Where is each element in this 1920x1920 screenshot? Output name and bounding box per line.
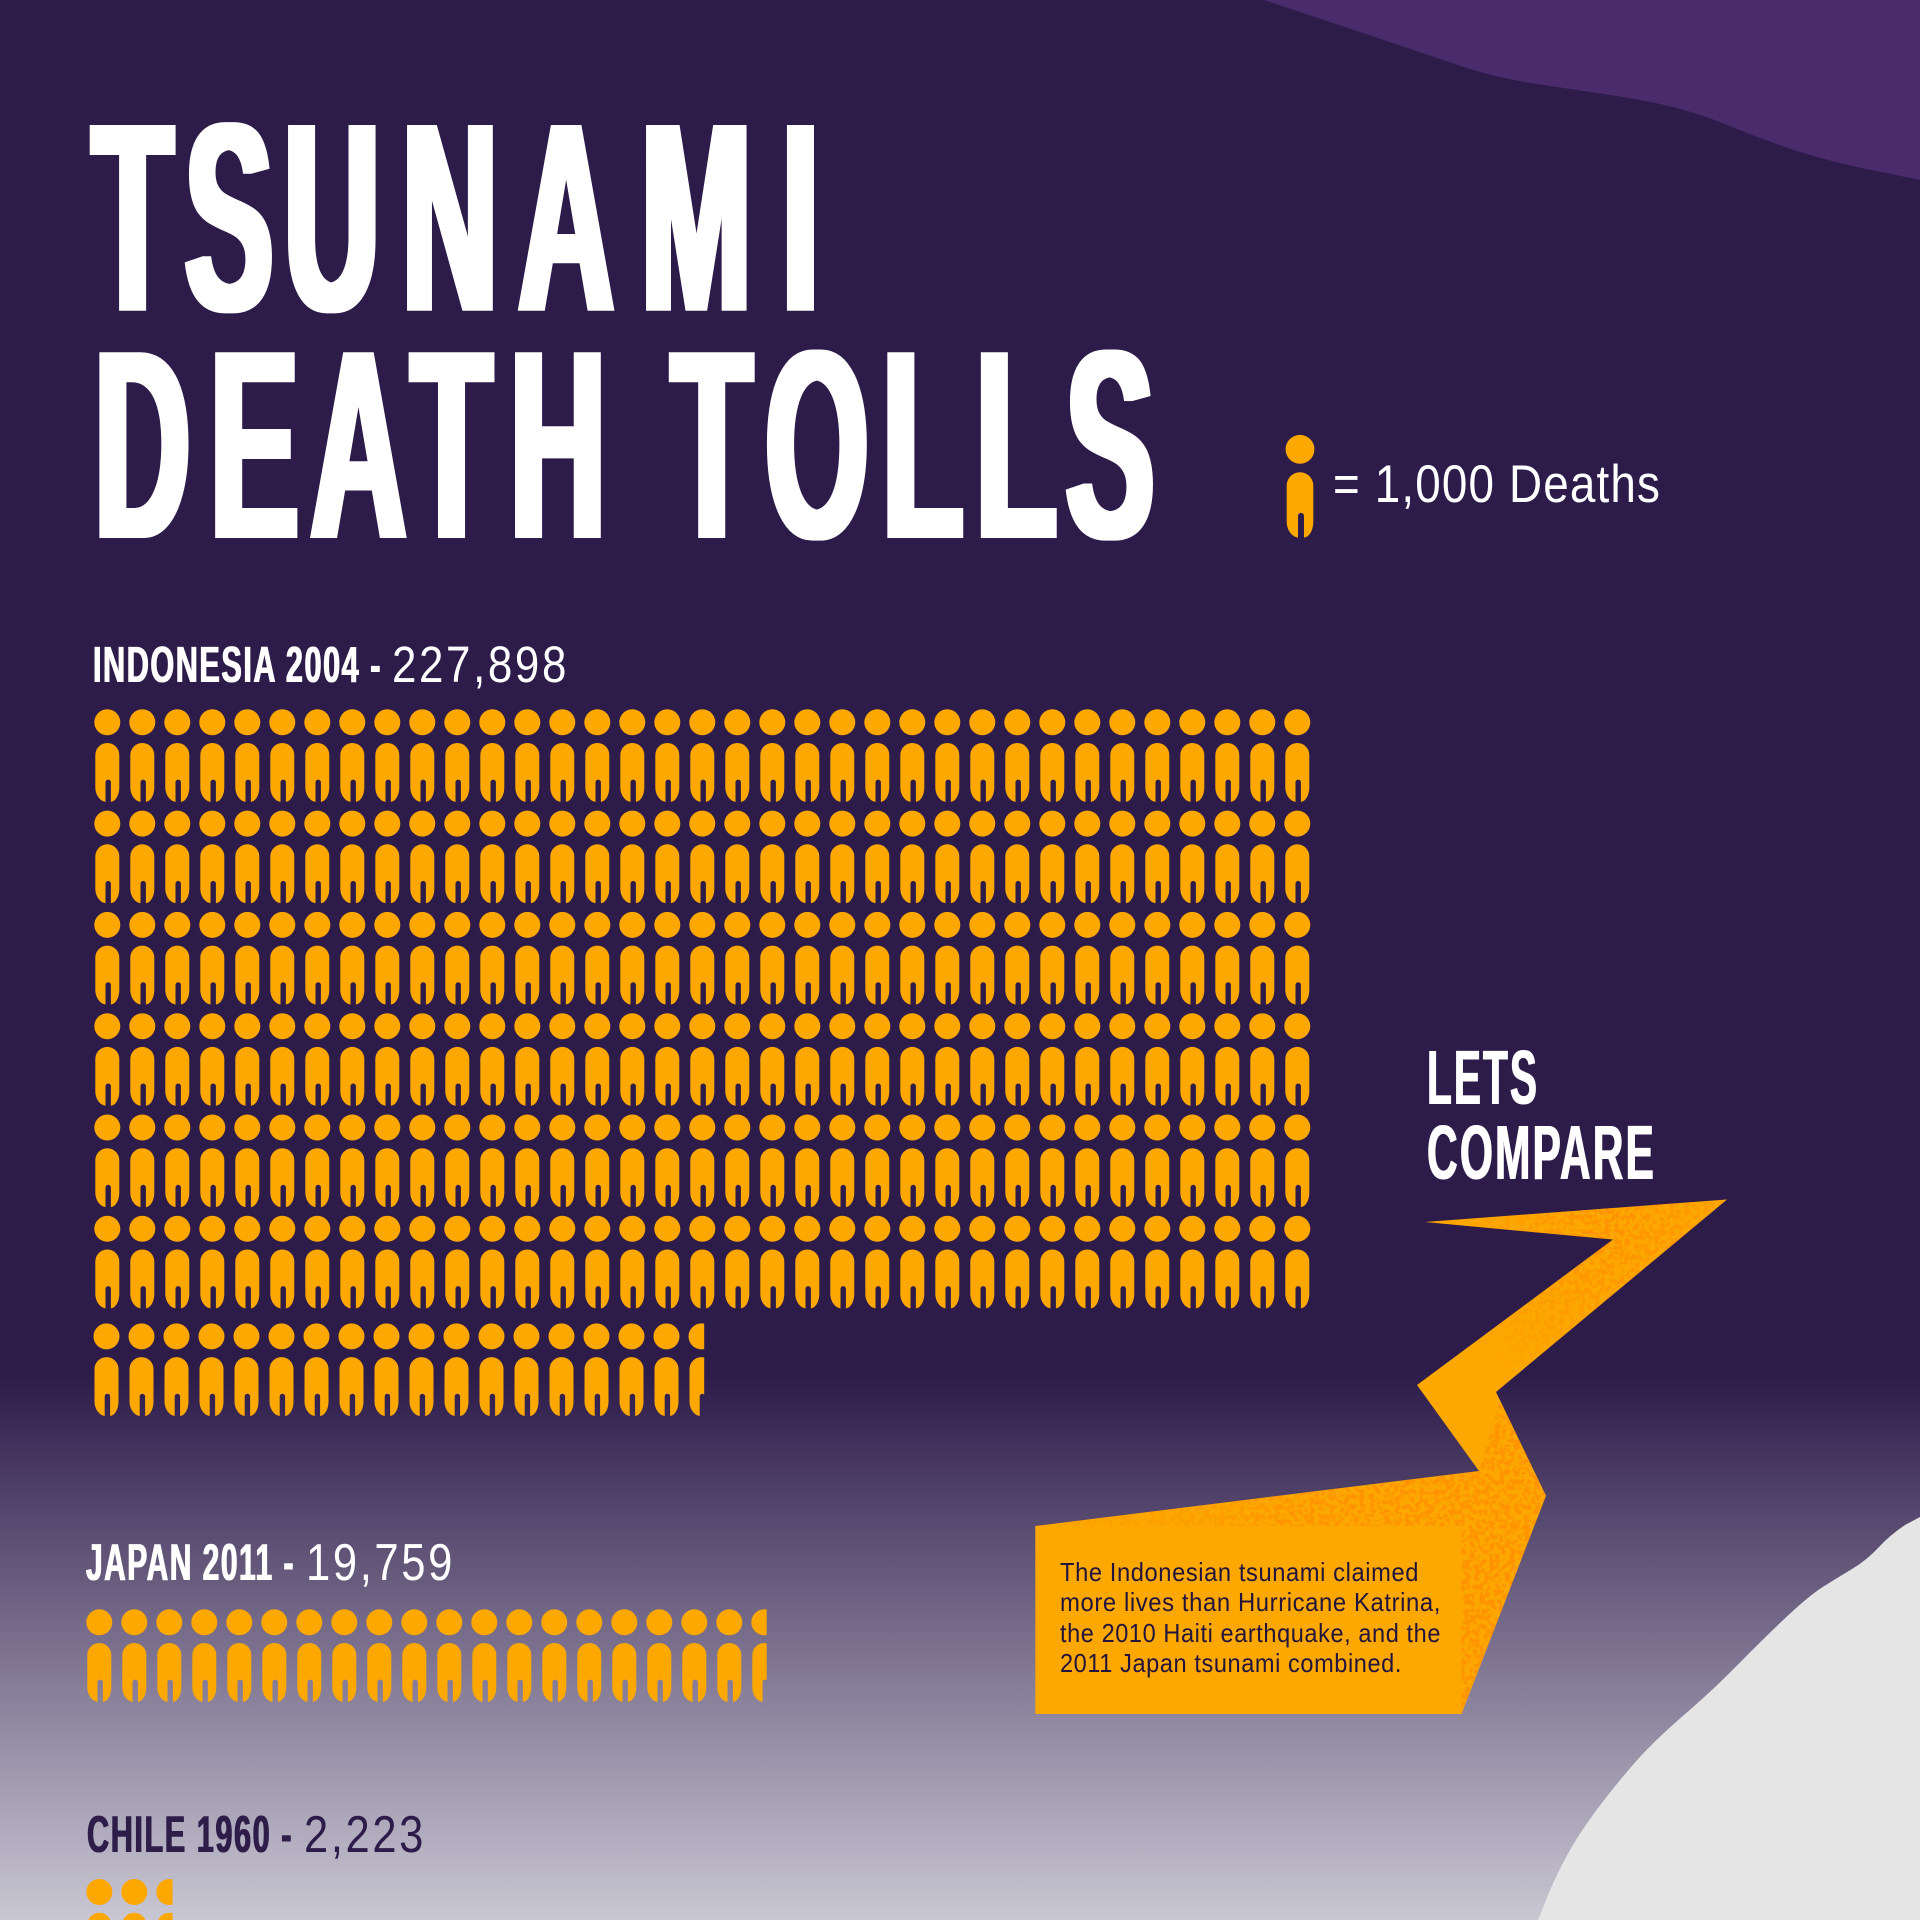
lets compare heading: LETS xyxy=(1427,1035,1539,1121)
callout text box xyxy=(1035,1526,1461,1714)
title: DEATH TOLLS xyxy=(95,295,1154,596)
heading: Indonesia 2004: INDONESIA 2004 - xyxy=(93,636,382,693)
heading: Japan 2011: 19,759 xyxy=(306,1534,455,1592)
callout text: the 2010 Haiti earthquake, and the xyxy=(1060,1618,1441,1648)
top right wave shape xyxy=(1264,0,1920,180)
lightning arrow callout xyxy=(1035,1200,1727,1714)
heading: Japan 2011: JAPAN 2011 - xyxy=(86,1534,295,1592)
title: TSUNAMI xyxy=(92,68,819,369)
heading: Chile 1960: 2,223 xyxy=(304,1806,426,1864)
title xyxy=(92,68,1154,596)
lets compare heading xyxy=(1427,1035,1656,1196)
pictogram: Indonesia 227,898 deaths xyxy=(94,709,1310,1416)
legend: one icon equals 1,000 deaths: = 1,000 Deaths xyxy=(1333,455,1661,514)
pictogram: Chile 2,223 deaths xyxy=(86,1879,182,1920)
lets compare heading: COMPARE xyxy=(1427,1110,1656,1196)
callout text: more lives than Hurricane Katrina, xyxy=(1060,1587,1441,1617)
bottom right wave shape xyxy=(1538,1517,1920,1920)
legend: one icon equals 1,000 deaths xyxy=(1286,435,1661,538)
heading: Indonesia 2004: 227,898 xyxy=(392,636,569,693)
callout text: 2011 Japan tsunami combined. xyxy=(1060,1648,1402,1678)
callout text xyxy=(1060,1557,1441,1678)
heading: Chile 1960: CHILE 1960 - xyxy=(87,1806,293,1864)
callout text: The Indonesian tsunami claimed xyxy=(1060,1557,1419,1587)
pictogram: Japan 19,759 deaths xyxy=(86,1609,777,1702)
